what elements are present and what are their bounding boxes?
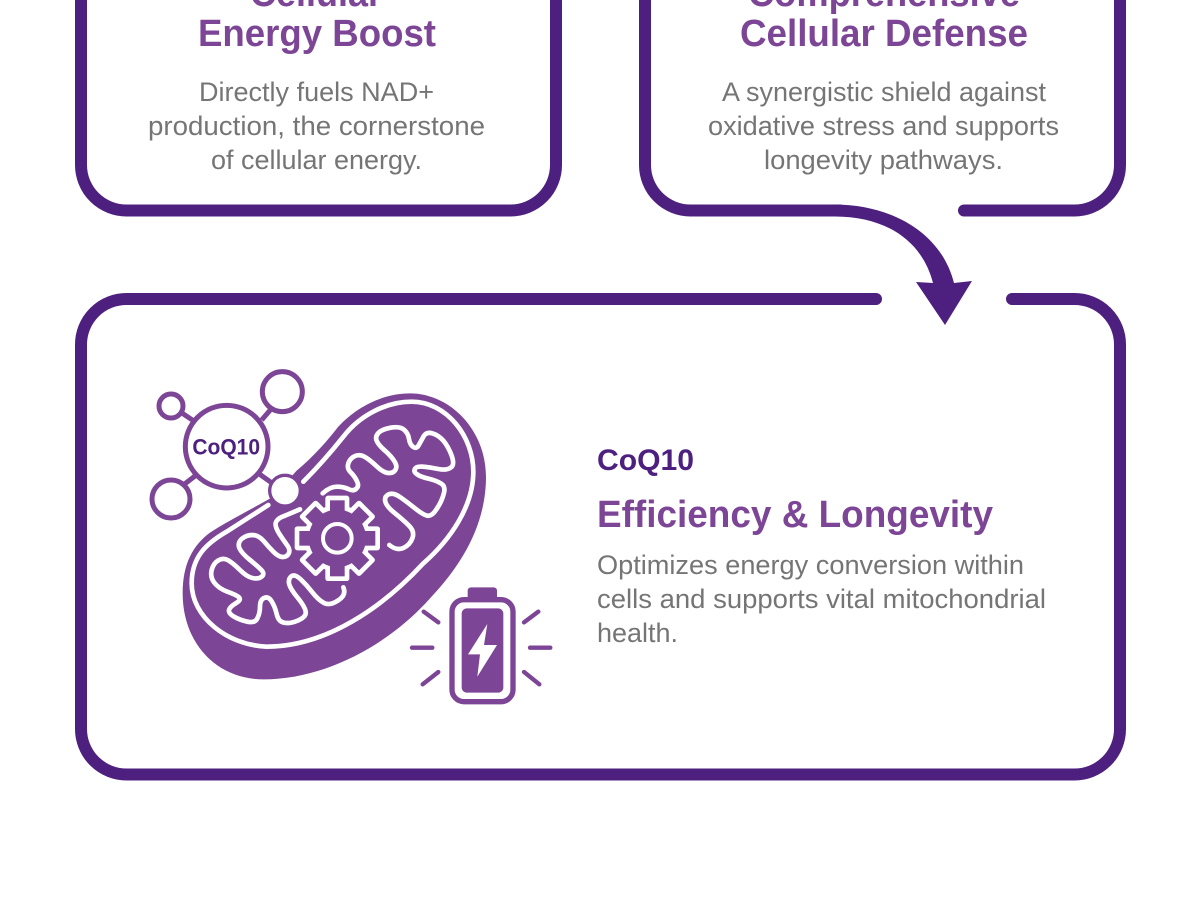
heading: efficiency and longevity: Efficiency & Longevity xyxy=(597,494,993,536)
icon: charged battery xyxy=(412,587,550,702)
icon: CoQ10 molecule: CoQ10 xyxy=(192,434,260,459)
description text: Optimizes energy conversion within xyxy=(597,550,1024,580)
panel border xyxy=(81,299,1120,774)
arrow: defense panel to CoQ10 panel xyxy=(835,204,972,325)
description text: oxidative stress and supports xyxy=(708,111,1059,141)
panel: cellular energy boost xyxy=(81,0,556,210)
icon: gear xyxy=(295,496,380,581)
panel border xyxy=(645,0,1120,210)
description text: of cellular energy. xyxy=(211,145,422,175)
heading: cellular energy boost: Energy Boost xyxy=(198,13,436,55)
panel: comprehensive cellular defense xyxy=(645,0,1120,210)
description text xyxy=(148,77,485,175)
description text: Directly fuels NAD+ xyxy=(199,77,434,107)
description text: A synergistic shield against xyxy=(722,77,1046,107)
panel: CoQ10 efficiency and longevity xyxy=(81,299,1120,774)
description text xyxy=(597,550,1046,648)
description text: production, the cornerstone xyxy=(148,111,485,141)
icon: mitochondrion xyxy=(183,393,486,679)
description text: health. xyxy=(597,618,678,648)
panel border xyxy=(81,0,556,210)
description text xyxy=(708,77,1059,175)
description text: longevity pathways. xyxy=(764,145,1003,175)
label: CoQ10: CoQ10 xyxy=(597,444,694,477)
illustration: mitochondrion, molecule and battery xyxy=(152,372,550,702)
icon: CoQ10 molecule xyxy=(152,372,302,518)
heading: comprehensive cellular defense: Cellular Defense xyxy=(740,13,1028,55)
description text: cells and supports vital mitochondrial xyxy=(597,584,1046,614)
